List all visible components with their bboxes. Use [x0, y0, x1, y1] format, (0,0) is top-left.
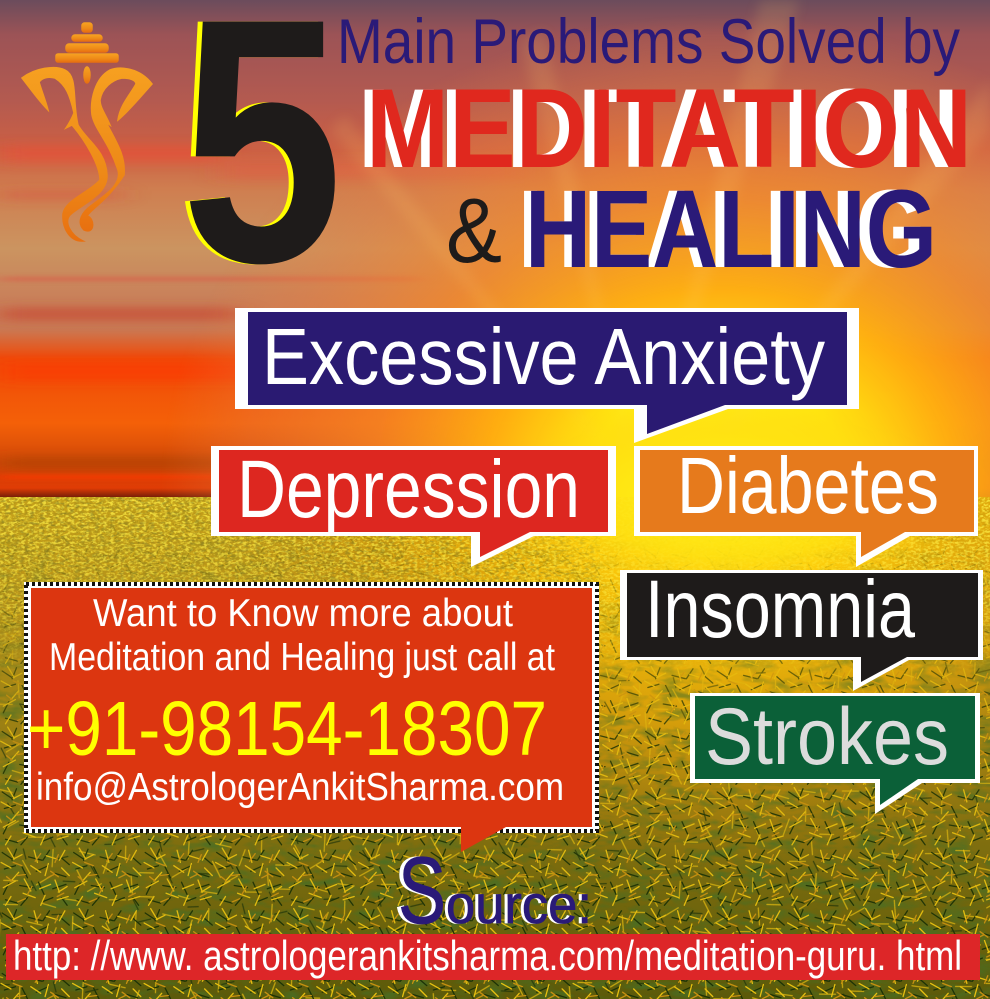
callout: depression — [211, 444, 616, 567]
callout: strokes — [690, 692, 980, 814]
callout: diabetes — [634, 441, 978, 567]
source label: S — [394, 838, 442, 944]
heading: ampersand: & — [446, 180, 502, 282]
source label — [394, 838, 592, 944]
callout: insomnia — [620, 564, 983, 691]
callout: strokes: Strokes — [705, 692, 949, 782]
contact: phone number: +91-98154-18307 — [27, 686, 547, 772]
callout: excessive anxiety: Excessive Anxiety — [262, 312, 825, 401]
panel: contact callout — [24, 582, 599, 852]
source label: ource: — [443, 875, 589, 935]
callout: insomnia: Insomnia — [645, 564, 915, 655]
contact: intro line one: Want to Know more about — [93, 592, 513, 635]
callout: excessive anxiety — [235, 308, 859, 443]
source label: S — [398, 838, 446, 944]
contact: intro line two: Meditation and Healing just call at — [49, 636, 555, 679]
icon: ganesha logo — [22, 23, 152, 241]
callout: depression: Depression — [237, 444, 580, 535]
callout: diabetes: Diabetes — [677, 441, 939, 530]
source label: ource: — [446, 875, 592, 935]
contact: email: info@AstrologerAnkitSharma.com — [36, 766, 564, 809]
background: grass field — [0, 396, 990, 999]
background: sunset sky — [0, 0, 990, 498]
